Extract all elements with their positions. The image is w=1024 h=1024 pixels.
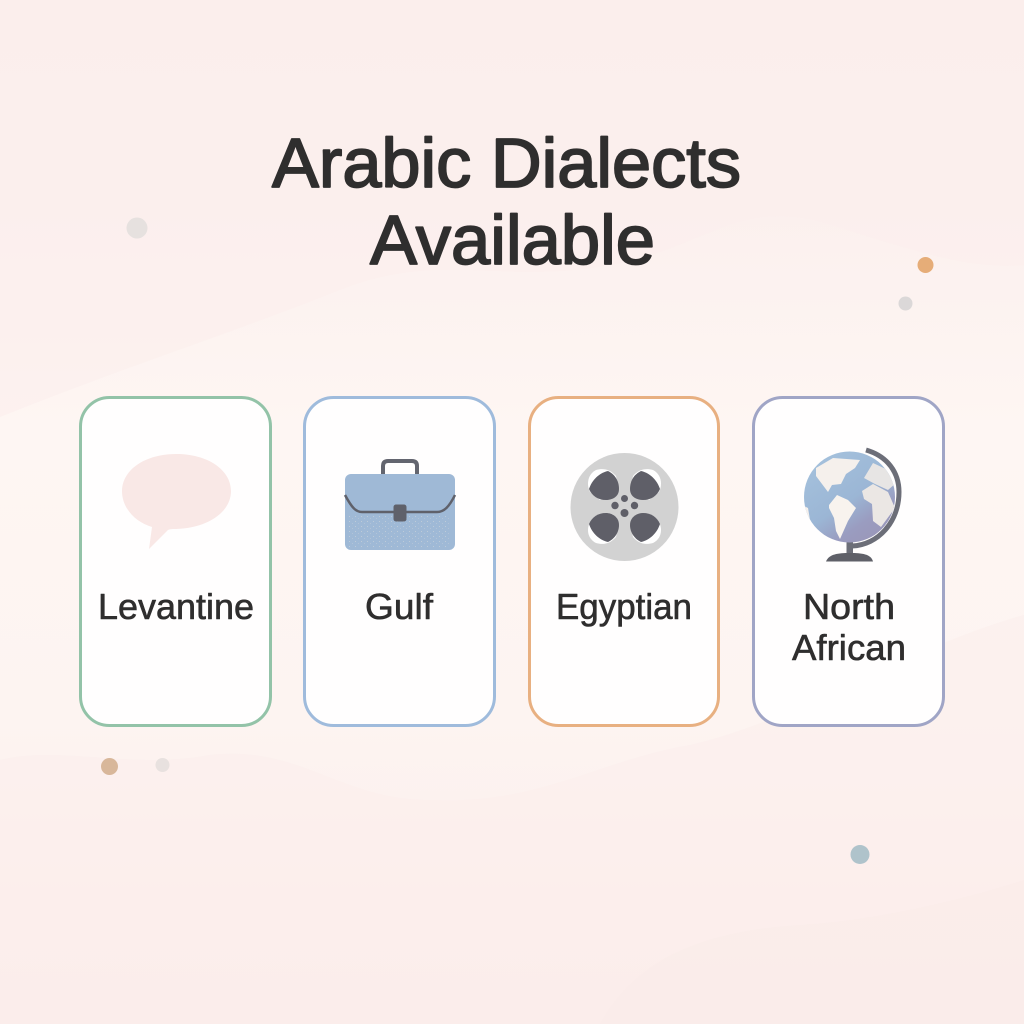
label: North African: [792, 586, 906, 668]
decorative dots: [101, 218, 934, 864]
panel: Levantine: [80, 398, 270, 726]
panel: North African: [754, 398, 944, 726]
icon: speech bubble: [122, 454, 231, 549]
title: [272, 124, 741, 279]
panel: Egyptian: [530, 398, 718, 726]
label: Gulf: Gulf: [365, 586, 434, 627]
icon: film reel: [570, 453, 678, 561]
label: Levantine: Levantine: [98, 586, 254, 627]
panel: Gulf: [304, 398, 494, 726]
label: Egyptian: Egyptian: [556, 586, 692, 627]
icon: briefcase: [345, 461, 455, 550]
title: Arabic Dialects: [272, 124, 741, 202]
icon: globe: [804, 450, 899, 562]
title: Available: [370, 201, 655, 279]
label: North African: North: [803, 586, 895, 627]
label: North African: African: [792, 627, 906, 668]
